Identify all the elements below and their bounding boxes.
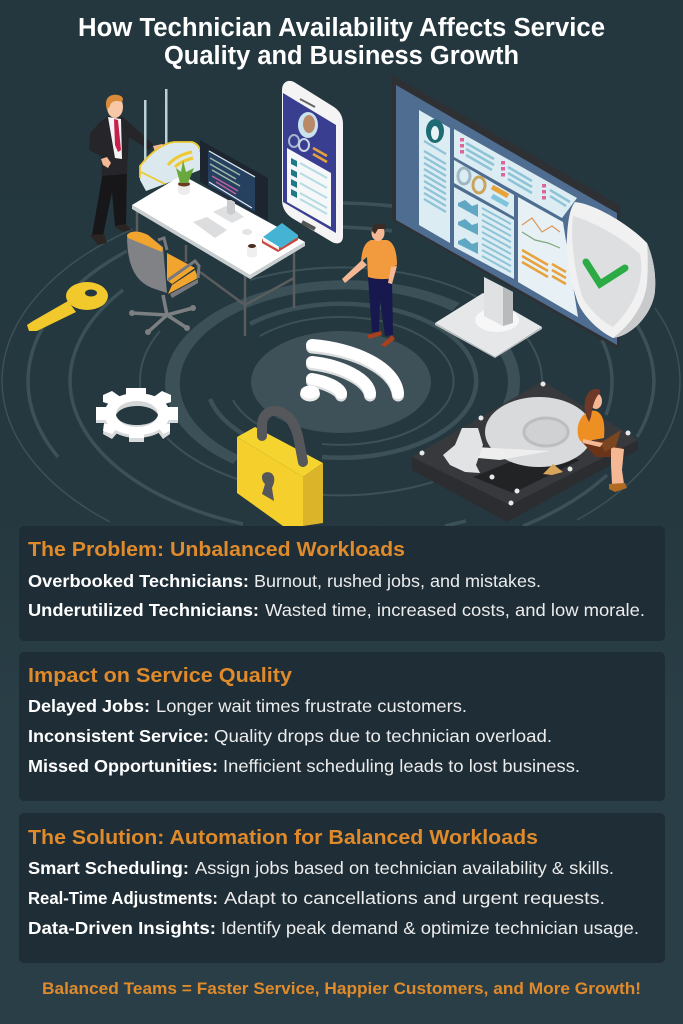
- text: missed opportunities: Inefficient scheduling leads to lost business.: [223, 756, 580, 776]
- illustration: office chair: [127, 232, 199, 335]
- illustration: standing man in orange shirt: [342, 224, 397, 347]
- text: smart scheduling: [28, 858, 614, 878]
- illustration: stack of books: [262, 223, 298, 252]
- text: real-time adjustments: [28, 888, 605, 908]
- text: missed opportunities: [28, 756, 580, 776]
- illustration: wifi router: [140, 89, 200, 191]
- text: smart scheduling: Smart Scheduling:: [28, 858, 189, 878]
- text: delayed jobs: Delayed Jobs:: [28, 696, 150, 716]
- text: overbooked technicians: Burnout, rushed jobs, and mistakes.: [254, 571, 541, 591]
- text: data-driven insights: [28, 918, 639, 938]
- profile panel: [419, 110, 450, 243]
- text: inconsistent service: [28, 726, 552, 746]
- illustration: potted plant: [176, 160, 194, 195]
- text: overbooked technicians: Overbooked Technicians:: [28, 571, 249, 591]
- heading: the solution: The Solution: Automation for Balanced Workloads: [28, 826, 538, 849]
- desk mouse: [242, 229, 252, 235]
- illustration: man in suit: [89, 95, 170, 245]
- illustration: hard drive: [412, 381, 638, 522]
- text: data-driven insights: Data-Driven Insights:: [28, 918, 216, 938]
- text: underutilized technicians: Underutilized Technicians:: [28, 600, 259, 620]
- illustration: large dashboard monitor: [392, 75, 655, 358]
- text: real-time adjustments: Real-Time Adjustments:: [28, 888, 218, 908]
- concentric signal rings: [2, 203, 680, 526]
- illustration: smartphone: [282, 81, 343, 243]
- panel: the solution: [19, 813, 665, 963]
- heading: the problem: The Problem: Unbalanced Workloads: [28, 538, 405, 561]
- text: real-time adjustments: Adapt to cancellations and urgent requests.: [224, 888, 605, 908]
- panel: the problem: [19, 526, 665, 641]
- text: missed opportunities: Missed Opportunities:: [28, 756, 218, 776]
- illustration: desktop code monitor: [200, 140, 268, 223]
- illustration: key: [27, 282, 108, 331]
- text: underutilized technicians: Wasted time, increased costs, and low morale.: [265, 600, 645, 620]
- donut chart panel: [454, 160, 514, 217]
- text: underutilized technicians: [28, 600, 645, 620]
- text: delayed jobs: Longer wait times frustrate customers.: [156, 696, 467, 716]
- heading: impact: Impact on Service Quality: [28, 664, 293, 687]
- text: inconsistent service: Inconsistent Service:: [28, 726, 209, 746]
- title: [78, 14, 605, 70]
- area chart panel: [454, 187, 514, 279]
- icon: padlock: [237, 411, 323, 526]
- icon: wifi: [300, 345, 398, 402]
- list panel: [454, 129, 577, 218]
- icon: gear: [96, 388, 178, 442]
- desk keyboard: [193, 217, 227, 238]
- line chart panel: [518, 197, 578, 317]
- shield with check mark: [567, 202, 655, 338]
- illustration: woman sitting on drive: [578, 389, 627, 492]
- footer tagline: Balanced Teams = Faster Service, Happier Customers, and More Growth!: [42, 980, 641, 998]
- text: smart scheduling: Assign jobs based on technician availability & skills.: [195, 858, 614, 878]
- illustration: office desk: [132, 175, 305, 336]
- text: inconsistent service: Quality drops due to technician overload.: [214, 726, 552, 746]
- text: data-driven insights: Identify peak demand & optimize technician usage.: [221, 918, 639, 938]
- text: overbooked technicians: [28, 571, 541, 591]
- text: delayed jobs: [28, 696, 467, 716]
- title: How Technician Availability Affects Service: [78, 14, 605, 42]
- title: Quality and Business Growth: [164, 42, 519, 70]
- panel: impact on service quality: [19, 652, 665, 801]
- monitor stand: [435, 277, 542, 358]
- desk coffee cup: [247, 244, 257, 258]
